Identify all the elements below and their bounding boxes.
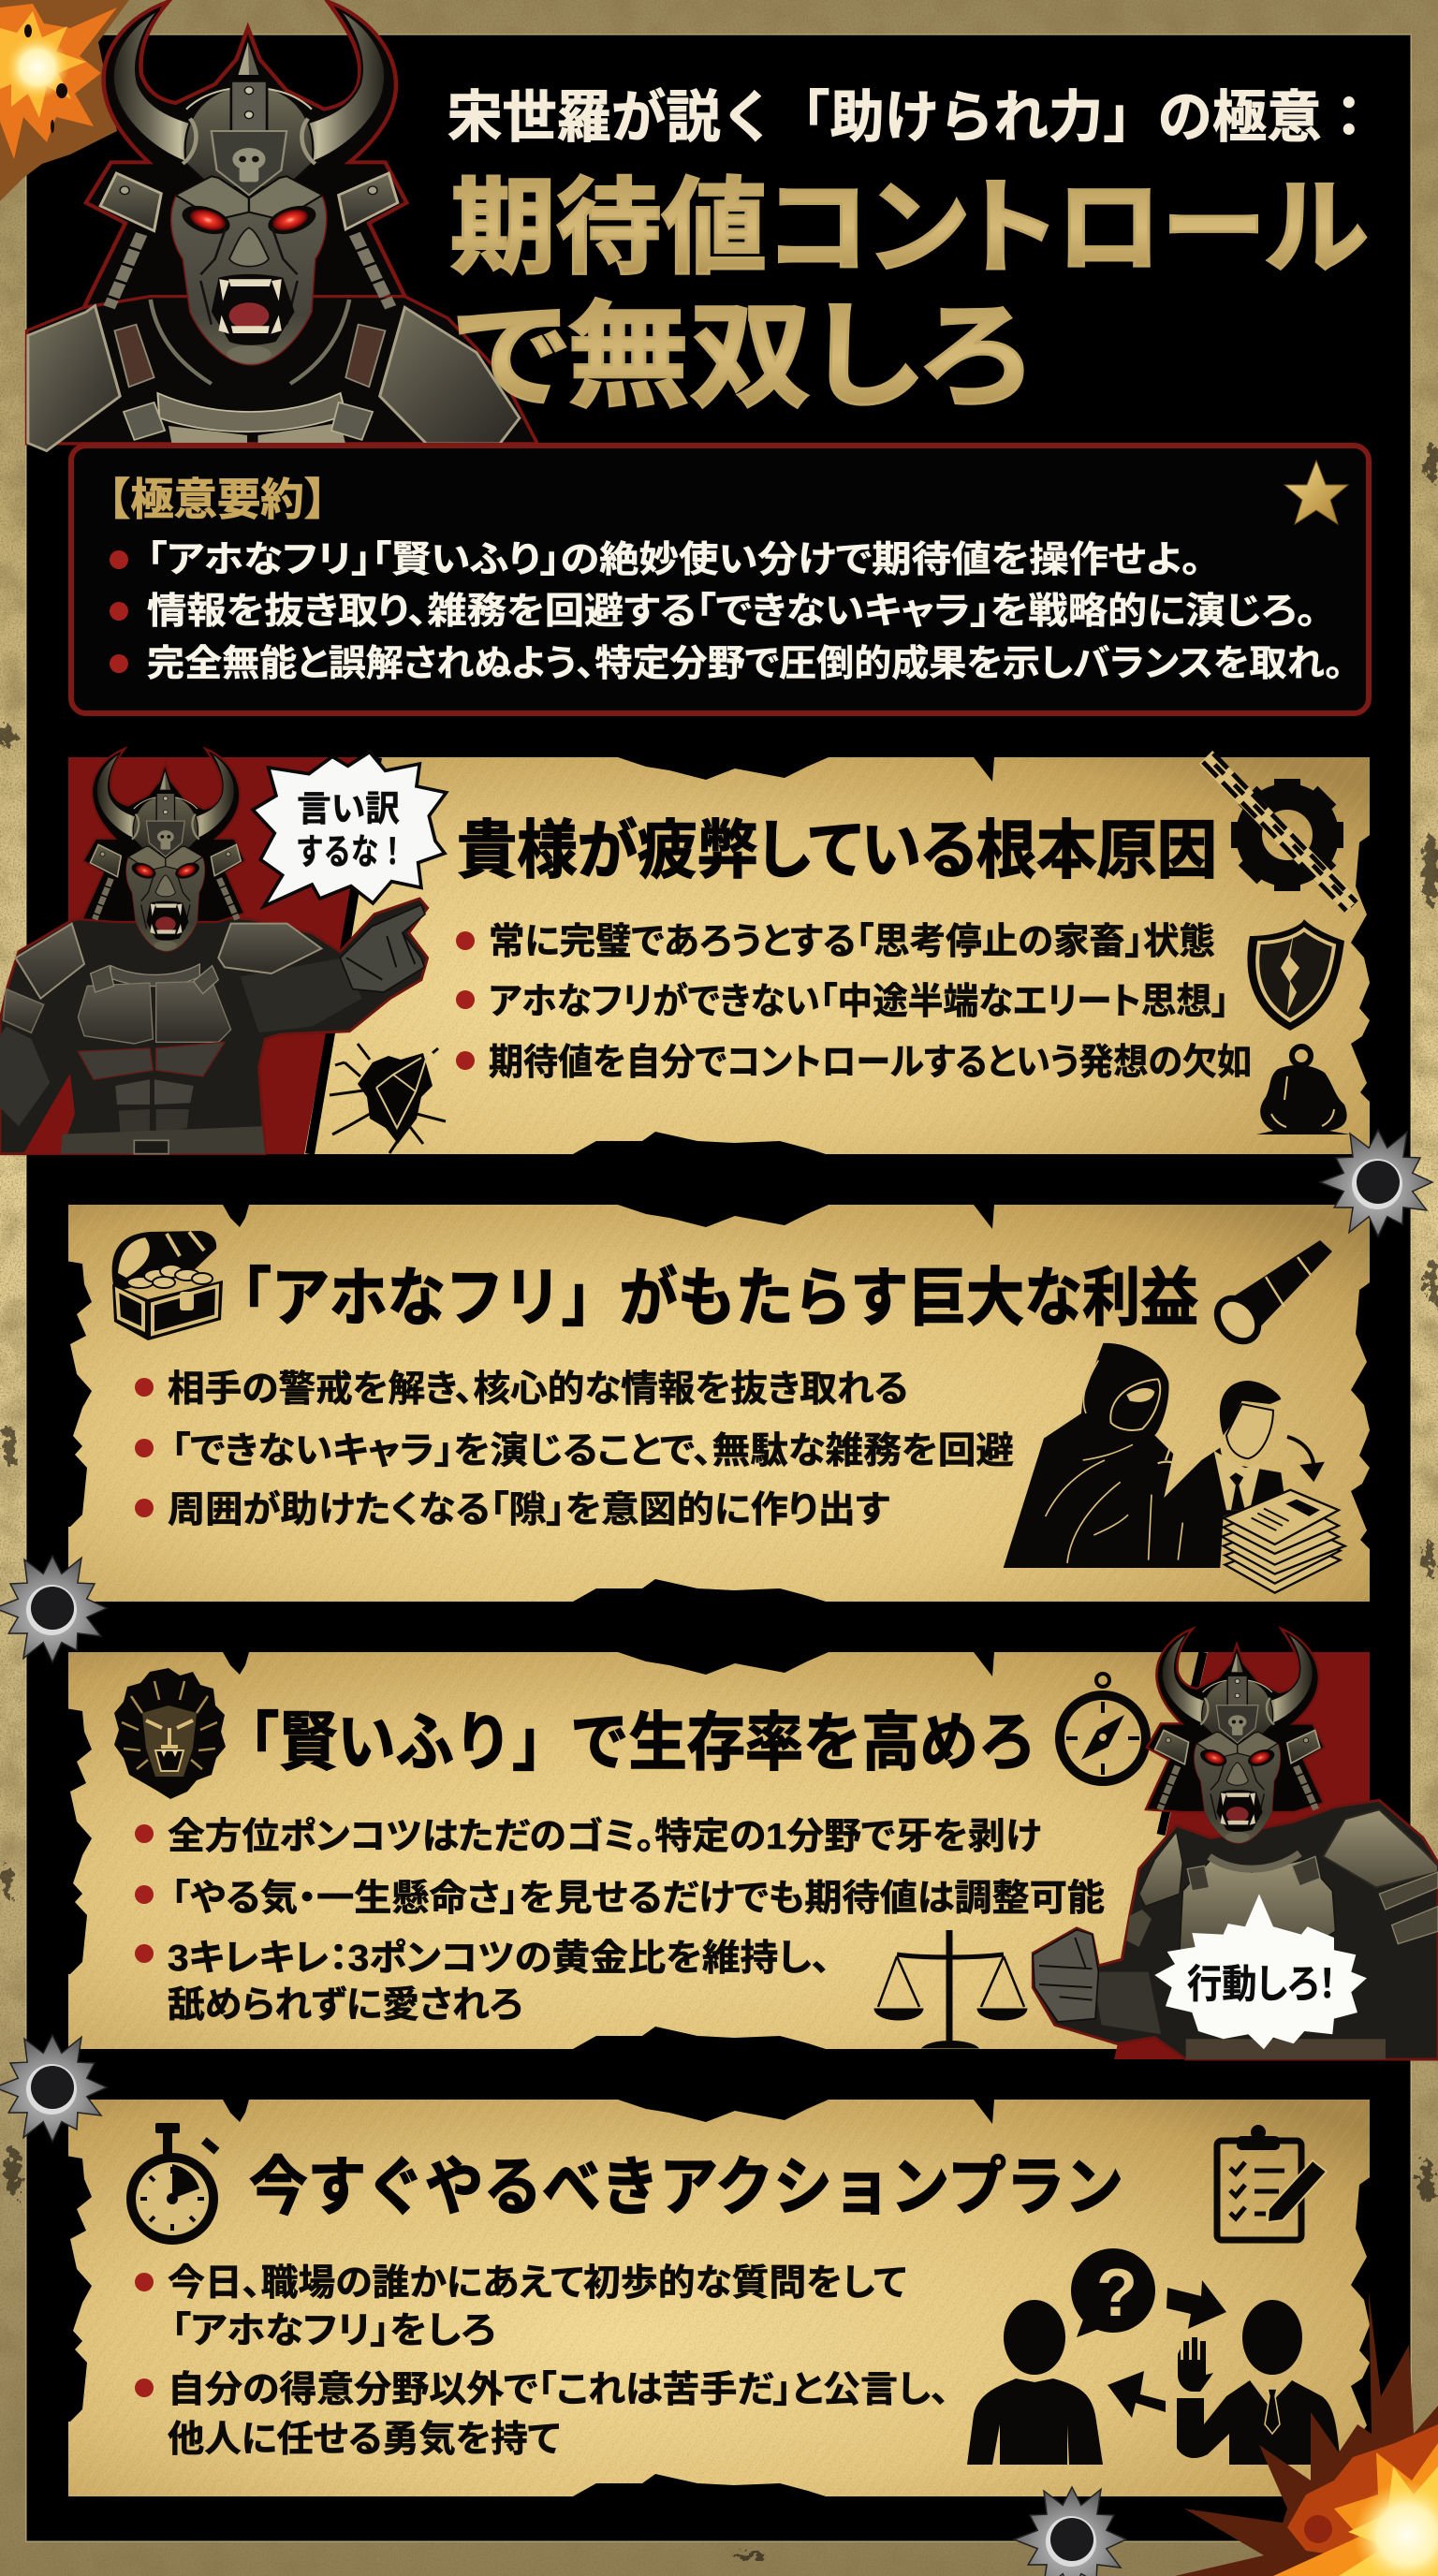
warrior: main header <box>27 2 537 451</box>
summary text: 「アホなフリ」「賢いふり」の絶妙使い分けで期待値を操作せよ。 <box>147 540 1201 580</box>
text: action plan: 自分の得意分野以外で「これは苦手だ」と公言し、 <box>168 2370 949 2410</box>
text: root causes <box>489 922 1252 1083</box>
text: survival: 「やる気・一生懸命さ」を見せるだけでも期待値は調整可能 <box>171 1879 1105 1919</box>
icon: balance scales <box>874 1930 1027 2048</box>
red backdrop: survival <box>992 1652 1370 2059</box>
speech burst: take action <box>1154 1894 1367 2049</box>
text: action plan: 今日、職場の誰かにあえて初歩的な質問をして <box>168 2263 906 2304</box>
panel: survival by seeming smart <box>66 1652 1370 2049</box>
summary text: 情報を抜き取り、雑務を回避する「できないキャラ」を戦略的に演じろ。 <box>147 592 1316 632</box>
speech burst: excuses: するな！ <box>296 833 406 872</box>
text: benefits: 相手の警戒を解き、核心的な情報を抜き取れる <box>168 1369 908 1410</box>
speech burst: excuses <box>253 752 447 906</box>
warrior: clenched fist <box>1033 1629 1438 2059</box>
text: benefits <box>168 1369 1014 1530</box>
bullets: root causes <box>456 931 475 1070</box>
icon: clipboard and pencil <box>1217 2125 1327 2240</box>
illustration: hooded figure and office worker <box>1004 1343 1345 1593</box>
illustration: two people exchanging a question <box>967 2248 1341 2465</box>
text: root causes: 期待値を自分でコントロールするという発想の欠如 <box>489 1043 1252 1083</box>
bullet holes <box>0 1130 1432 2576</box>
bullets: survival <box>135 1824 154 1963</box>
text: action plan <box>168 2263 949 2460</box>
text: survival <box>168 1817 1105 2026</box>
icon: gear <box>1231 779 1343 891</box>
text: survival: 全方位ポンコツはただのゴミ。特定の1分野で牙を剥け <box>168 1817 1041 1857</box>
summary text: 完全無能と誤解されぬよう、特定分野で圧倒的成果を示しバランスを取れ。 <box>147 644 1343 684</box>
title <box>448 86 1376 422</box>
speech burst: take action: 行動しろ！ <box>1187 1962 1336 2006</box>
title: 期待値コントロール <box>450 169 1368 286</box>
icon: heavy weight <box>1256 1046 1350 1134</box>
panel: root causes <box>68 754 1372 1154</box>
icon: cracked shield <box>1247 919 1344 1031</box>
icon: lion <box>114 1668 226 1799</box>
panel heading: benefits: 「アホなフリ」がもたらす巨大な利益 <box>213 1263 1198 1334</box>
explosion: top left <box>0 0 129 201</box>
icon: compass <box>1060 1674 1146 1781</box>
panel heading: survival: 「賢いふり」で生存率を高めろ <box>221 1707 1036 1778</box>
text: survival: 舐められずに愛されろ <box>168 1985 522 2026</box>
icon: chain <box>1203 754 1357 911</box>
speech burst: excuses: 言い訳 <box>297 790 400 829</box>
panel heading: root causes: 貴様が疲弊している根本原因 <box>457 815 1217 886</box>
text: root causes: アホなフリができない「中途半端なエリート思想」 <box>489 982 1229 1022</box>
text: benefits: 周囲が助けたくなる「隙」を意図的に作り出す <box>168 1490 889 1530</box>
red backdrop: root causes <box>68 757 377 1154</box>
icon: gold star <box>1284 461 1348 524</box>
title: 宋世羅が説く「助けられ力」の極意： <box>448 86 1376 149</box>
panel: action plan <box>66 2100 1372 2496</box>
icon: spyglass <box>1209 1240 1332 1349</box>
warrior: pointing <box>0 749 428 1154</box>
icon: treasure chest <box>112 1231 223 1340</box>
bullets: benefits <box>135 1378 154 1517</box>
bullets: action plan <box>135 2273 154 2397</box>
panel: summary <box>71 446 1369 713</box>
text: action plan: 他人に任せる勇気を持て <box>168 2420 560 2460</box>
summary heading: 【極意要約】 <box>87 475 347 524</box>
panel: benefits of playing dumb <box>66 1205 1372 1602</box>
explosion: bottom right <box>1175 2291 1438 2576</box>
text: survival: 3キレキレ：3ポンコツの黄金比を維持し、 <box>168 1939 830 1979</box>
illustration: two people exchanging a question: ? <box>1096 2256 1137 2331</box>
text: benefits: 「できないキャラ」を演じることで、無駄な雑務を回避 <box>171 1431 1014 1471</box>
text: root causes: 常に完璧であろうとする「思考停止の家畜」状態 <box>489 922 1215 962</box>
summary text <box>147 540 1343 684</box>
summary bullets <box>110 550 128 673</box>
title: で無双しろ <box>456 293 1029 422</box>
text: action plan: 「アホなフリ」をしろ <box>171 2311 495 2351</box>
panel heading: action plan: 今すぐやるべきアクションプラン <box>249 2152 1123 2223</box>
icon: wall crack <box>330 1044 446 1153</box>
icon: stopwatch <box>131 2123 219 2240</box>
